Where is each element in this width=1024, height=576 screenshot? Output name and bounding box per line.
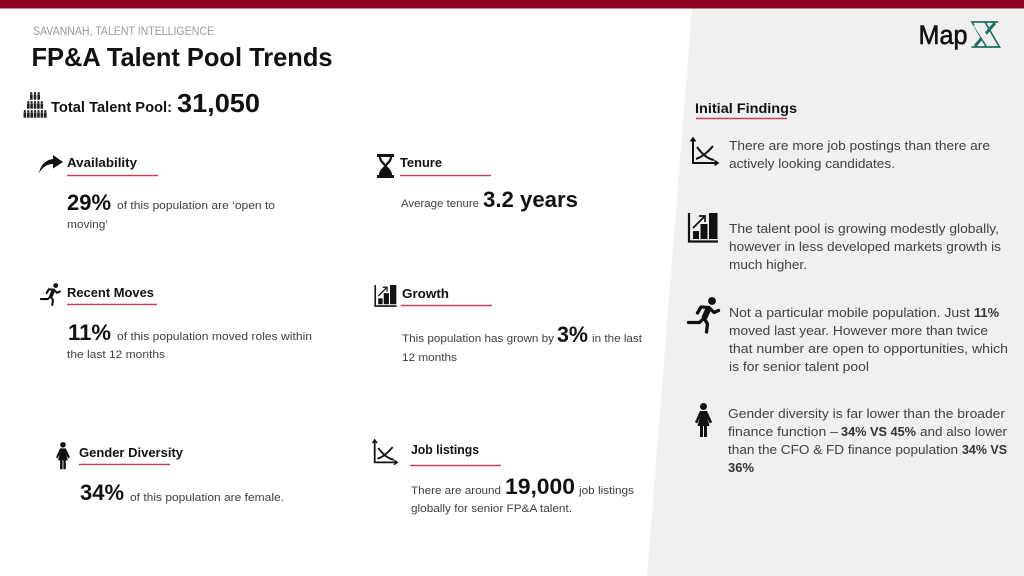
stat text: 3.2 years [483, 187, 578, 212]
finding 3: 11% [974, 305, 999, 320]
icon: crossing trend chart [690, 138, 718, 166]
stat text [80, 480, 284, 505]
eyebrow text: SAVANNAH, TALENT INTELLIGENCE [33, 26, 214, 38]
icon: crowd of people [24, 92, 47, 118]
panel: gender diversity [56, 442, 284, 505]
icon: runner [688, 297, 718, 332]
total talent pool [24, 88, 260, 118]
stat text [411, 474, 634, 515]
finding 4: Gender diversity is far lower than the broader [728, 406, 1006, 421]
finding 2: much higher. [729, 257, 807, 272]
stat text: 29% [67, 190, 111, 215]
panel: availability [39, 155, 275, 231]
label: Total Talent Pool: [51, 100, 172, 116]
finding 3: is for senior talent pool [729, 359, 869, 374]
panel: initial findings [688, 100, 1008, 475]
heading: Job listings [411, 442, 479, 457]
stat text: globally for senior FP&A talent. [411, 503, 572, 515]
icon: crossing trend chart [372, 440, 397, 465]
top bar [0, 0, 1024, 8]
stat text: 3% [557, 322, 588, 347]
icon: growth chart [375, 285, 397, 306]
finding 1 [690, 138, 990, 171]
stat text [67, 320, 312, 361]
stat text [67, 190, 275, 231]
finding 4 [695, 403, 1008, 475]
finding 4: finance function – [728, 424, 839, 439]
stat text: of this population are ‘open to [117, 200, 275, 212]
heading: Growth [402, 286, 449, 301]
finding 4: and also lower [920, 424, 1008, 439]
finding 2: however in less developed markets growth is [729, 239, 1001, 254]
heading: Availability [67, 155, 138, 170]
icon: growth chart [689, 213, 718, 242]
finding 2: The talent pool is growing modestly globally, [729, 221, 999, 236]
stat text [401, 187, 578, 212]
number: 31,050 [177, 88, 260, 118]
finding 4: 34% VS [962, 442, 1007, 457]
stat text: 12 months [402, 352, 457, 364]
heading: Recent Moves [67, 285, 154, 300]
title: FP&A Talent Pool Trends [32, 42, 332, 72]
stat text [402, 322, 643, 364]
stat text: Average tenure [401, 198, 479, 210]
stat text: of this population moved roles within [117, 331, 312, 343]
heading: Tenure [400, 155, 442, 170]
stat text: 11% [68, 320, 111, 345]
finding 3: that number are open to opportunities, which [729, 341, 1008, 356]
stat text: moving’ [67, 219, 108, 231]
finding 4: 36% [728, 460, 754, 475]
finding 3: Not a particular mobile population. Just [729, 305, 970, 320]
logo: MapX [918, 20, 1000, 50]
finding 1: actively looking candidates. [729, 156, 895, 171]
finding 3: moved last year. However more than twice [729, 323, 988, 338]
icon: hourglass [377, 154, 394, 178]
finding 2 [689, 213, 1001, 272]
panel: findings background [647, 8, 1024, 576]
panel: job listings [372, 440, 634, 515]
icon: runner [41, 283, 60, 305]
finding 4: than the CFO & FD finance population [728, 442, 958, 457]
stat text: 34% [80, 480, 124, 505]
heading: Gender Diversity [79, 445, 184, 460]
stat text: in the last [592, 333, 643, 345]
icon: curved arrow [39, 155, 63, 173]
logo: MapX: Map [918, 20, 968, 50]
panel: tenure [377, 154, 578, 212]
stat text: There are around [411, 485, 501, 497]
panel: growth [375, 285, 643, 364]
stat text: This population has grown by [402, 333, 554, 345]
stat text: 19,000 [505, 474, 575, 499]
icon: woman [56, 442, 70, 469]
stat text: job listings [578, 485, 634, 497]
finding 4: 34% VS 45% [841, 424, 916, 439]
stat text: the last 12 months [67, 349, 165, 361]
finding 1: There are more job postings than there are [729, 138, 990, 153]
finding 3 [688, 297, 1008, 374]
panel: recent moves [41, 283, 312, 361]
icon: woman [695, 403, 712, 437]
stat text: of this population are female. [130, 492, 284, 504]
heading: Initial Findings [695, 100, 797, 116]
